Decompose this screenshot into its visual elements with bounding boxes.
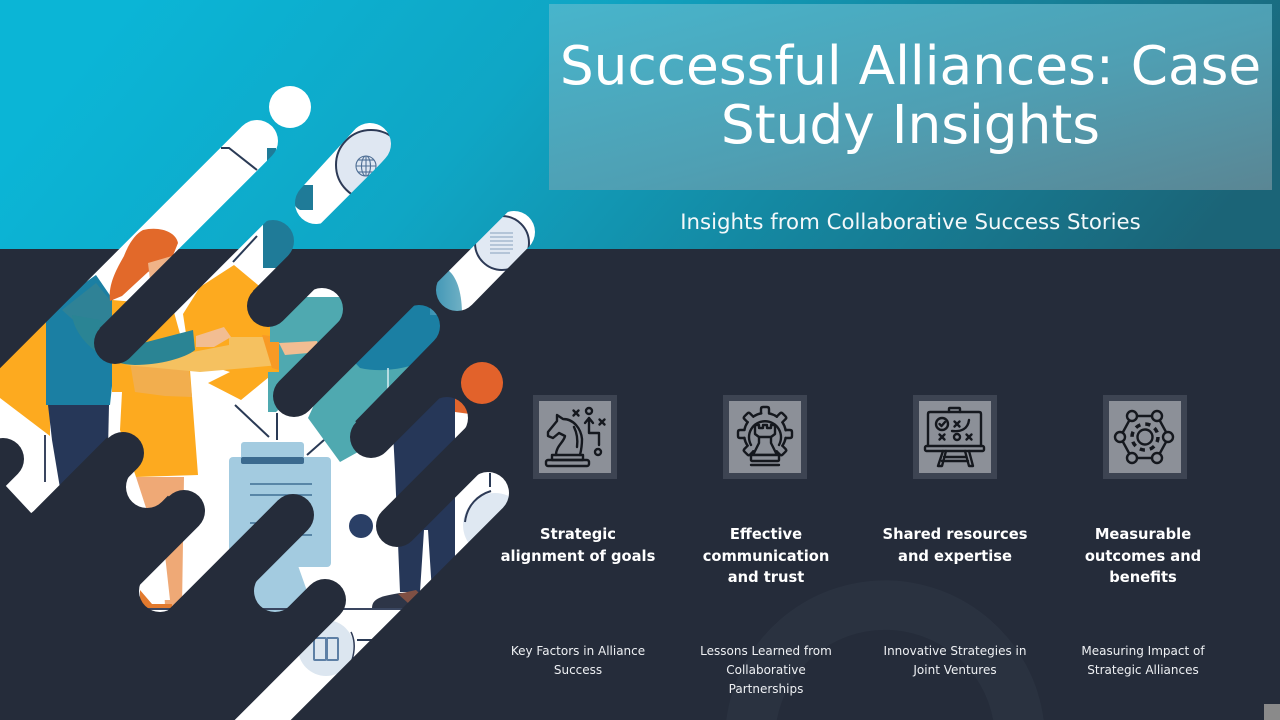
globe icon [356, 156, 376, 176]
globe pill teal tab [295, 185, 313, 210]
corner marker [1264, 704, 1280, 720]
heading: column 3 [883, 526, 1027, 565]
text: column 4 [1081, 644, 1205, 677]
icon tile: strategy knight [533, 395, 617, 479]
luggage icon [314, 638, 338, 660]
document icon [490, 233, 513, 253]
text: column 4: Measuring Impact of [1081, 644, 1205, 658]
teal jacket [308, 364, 410, 462]
text: column 1 [511, 644, 645, 677]
top gradient banner [0, 0, 1280, 249]
connector lines [221, 148, 490, 640]
hand right [279, 341, 320, 355]
text: column 3 [884, 644, 1026, 677]
heading: column 2: Effective [730, 526, 802, 543]
right man: orange patch [455, 396, 470, 414]
clipboard top [241, 442, 304, 457]
clipboard lines [250, 484, 312, 535]
right man: shoe detail [398, 590, 422, 603]
text: column 3: Innovative Strategies in [884, 644, 1026, 658]
woman: legs [136, 477, 184, 607]
sandals [140, 590, 172, 610]
man: shoulder [62, 283, 112, 323]
heading: column 1: alignment of goals [501, 548, 655, 565]
yellow folder [183, 265, 285, 400]
text: column 1: Success [554, 663, 602, 677]
text: column 2: Collaborative [726, 663, 806, 677]
orange dot [461, 362, 503, 404]
document disc [475, 216, 529, 270]
title panel [549, 4, 1272, 190]
title: Study Insights [721, 94, 1100, 156]
heading: column 4: outcomes and [1085, 548, 1201, 565]
title [560, 35, 1261, 156]
dark lower background [0, 249, 1280, 720]
woman: sash [130, 366, 192, 397]
bottom disc [298, 620, 354, 676]
left yellow shape [0, 322, 50, 436]
woman: face [148, 256, 172, 278]
heading: column 1 [501, 526, 655, 565]
text: column 2: Partnerships [729, 682, 803, 696]
blue top [356, 305, 440, 370]
title: Successful Alliances: Case [560, 35, 1261, 97]
heading: column 4 [1085, 526, 1201, 586]
hand [196, 327, 231, 347]
icon tile: rook and gear [723, 395, 807, 479]
clipboard tail [254, 567, 306, 612]
heading: column 4: Measurable [1095, 526, 1191, 543]
man: torso [46, 275, 120, 405]
teal panel in strip F [263, 220, 294, 268]
illustration: people collaborating in diagonal strips [0, 100, 560, 720]
right man: legs [391, 395, 458, 592]
text: column 2 [700, 644, 832, 696]
right man: shoe [372, 592, 420, 608]
woman's arm [125, 337, 280, 372]
heading: column 2 [703, 526, 829, 586]
heading: column 3: and expertise [898, 548, 1012, 565]
text: column 4: Strategic Alliances [1087, 663, 1199, 677]
white gap between legs [163, 559, 170, 600]
heading: column 2: communication [703, 548, 829, 565]
heading: column 2: and trust [728, 569, 804, 586]
man arm [73, 320, 195, 365]
teal person front [268, 340, 320, 412]
disc arc [465, 491, 491, 522]
orange sleeve edge [262, 335, 279, 370]
woman: dress [112, 300, 198, 477]
bottom arc [351, 632, 354, 660]
white dot [269, 86, 311, 128]
subtitle: Insights from Collaborative Success Stories [680, 210, 1141, 235]
thin line left [44, 435, 46, 482]
right man: white gap [455, 400, 470, 560]
clipboard band [241, 457, 304, 464]
text: column 3: Joint Ventures [913, 663, 997, 677]
woman: hair [110, 229, 178, 301]
man: legs [48, 405, 109, 485]
text: column 1: Key Factors in Alliance [511, 644, 645, 658]
navy dot [349, 514, 373, 538]
icon tile: strategy board [913, 395, 997, 479]
heading: column 4: benefits [1109, 569, 1177, 586]
text: column 2: Lessons Learned from [700, 644, 832, 658]
disc lower right [463, 493, 527, 557]
icon tile: network hub [1103, 395, 1187, 479]
floor line [140, 608, 410, 610]
teal person top [270, 297, 345, 342]
decorative arc [726, 580, 1044, 720]
globe disc [335, 129, 391, 194]
teal tab in strip A [267, 148, 276, 162]
white seam [387, 368, 389, 388]
teal patch in document pill [430, 270, 462, 315]
heading: column 3: Shared resources [883, 526, 1027, 543]
clipboard body [229, 457, 331, 567]
heading: column 1: Strategic [540, 526, 616, 543]
